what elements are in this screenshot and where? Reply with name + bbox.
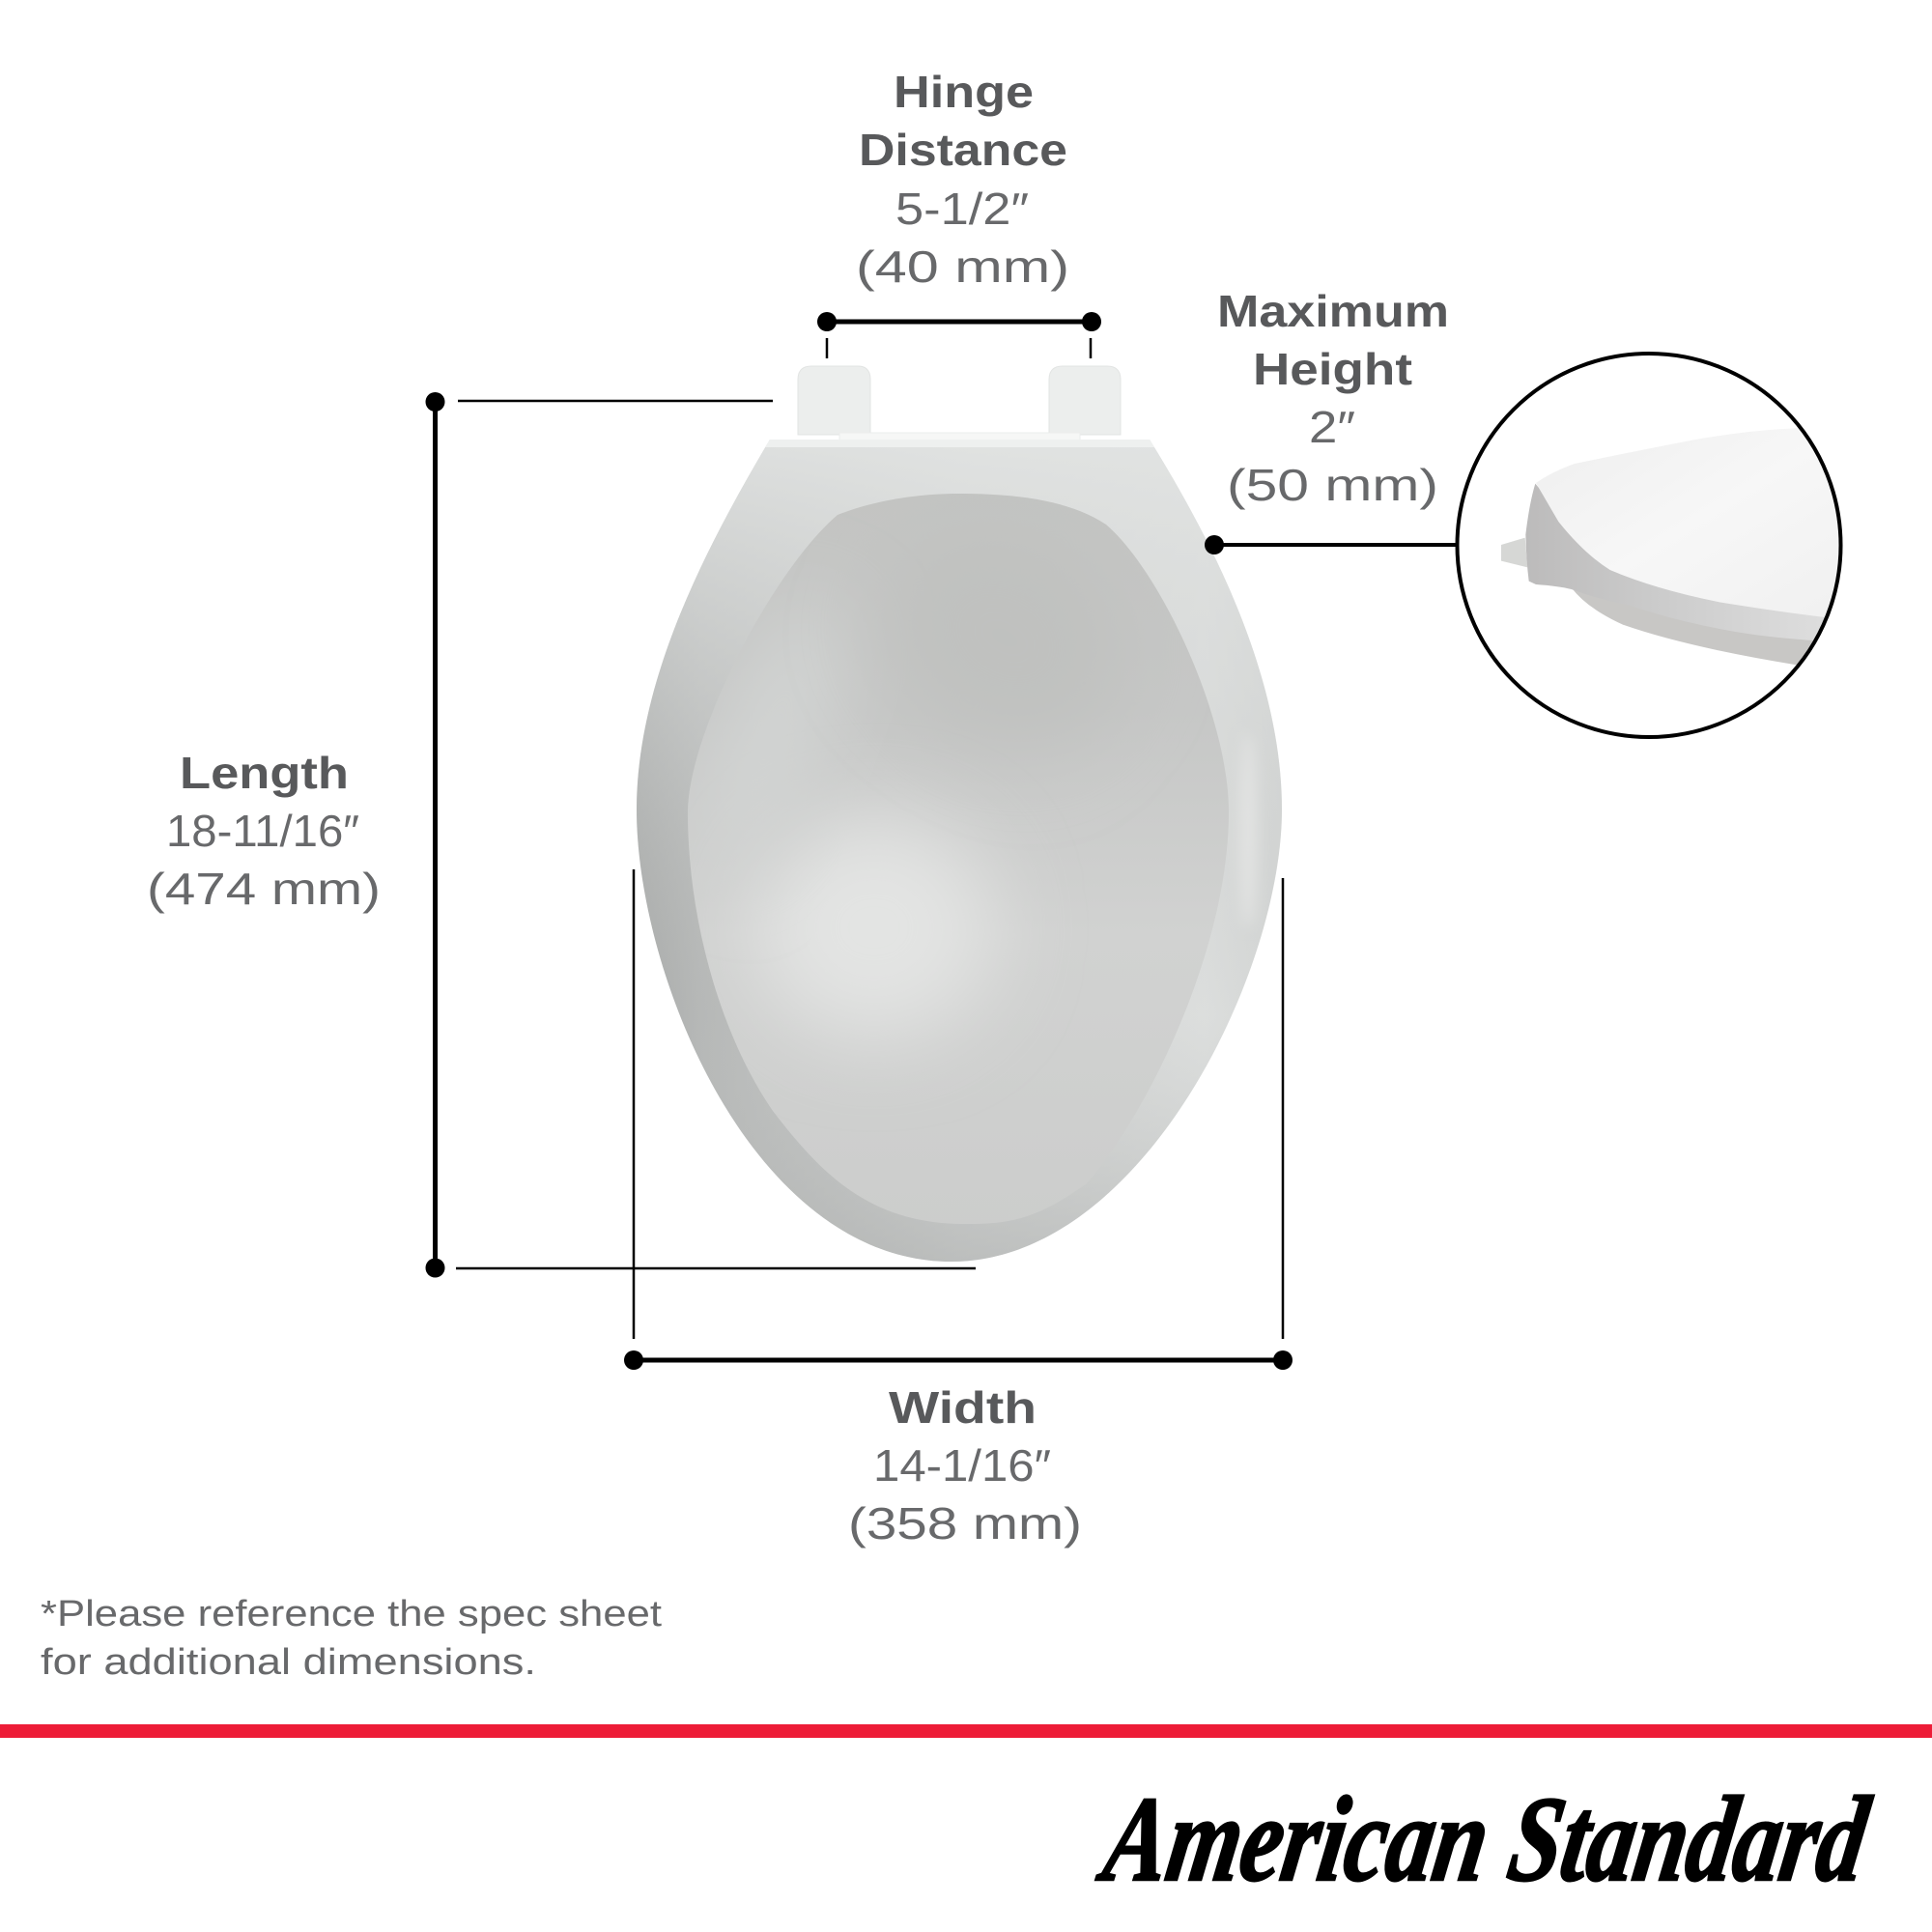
label: length: (474 mm) [147,864,381,914]
panel dark band [842,483,1167,792]
seat rim shading [637,440,1282,1262]
label: maximum height: (50 mm) [1227,460,1438,510]
length dimension line [425,392,976,1277]
label: maximum height: Maximum [1217,286,1449,336]
label: hinge distance [856,67,1069,292]
profile side face [1525,484,1848,642]
label: hinge distance: 5-1/2″ [895,184,1029,234]
seat recessed panel [667,483,1246,1236]
label: maximum height: 2″ [1309,402,1355,452]
label: length: Length [180,748,349,798]
label: length [147,748,381,914]
seat rim highlight [1239,734,1257,927]
label: length: 18-11/16″ [166,806,359,856]
inset circle outline [1457,354,1841,737]
profile top surface [1536,425,1848,620]
label: maximum height [1217,286,1449,510]
seat top edge [765,440,1154,447]
seat outer lid [637,440,1282,1262]
footnote: *Please reference the spec sheet [41,1594,663,1634]
red divider bar [0,1724,1932,1738]
left hinge [798,366,870,435]
hinge distance dimension line [817,312,1101,358]
inset: side profile of seat [1457,354,1848,737]
footnote [41,1594,663,1683]
label: width: (358 mm) [848,1498,1082,1548]
toilet seat illustration [637,366,1282,1262]
profile underside [1573,589,1813,665]
maximum height leader line [1205,535,1457,554]
label: hinge distance: (40 mm) [856,242,1069,292]
hinge bar [839,433,1080,440]
label: width: Width [889,1382,1037,1433]
profile tab [1501,538,1527,567]
label: hinge distance: Hinge [894,67,1034,117]
label: width: 14-1/16″ [873,1440,1051,1491]
footnote: for additional dimensions. [41,1642,536,1683]
width dimension line [624,869,1293,1370]
panel soft band [733,638,825,771]
panel highlight [753,816,995,1038]
label: width [848,1382,1082,1548]
label: hinge distance: Distance [859,125,1067,175]
label: maximum height: Height [1253,344,1412,394]
right hinge [1049,366,1121,435]
